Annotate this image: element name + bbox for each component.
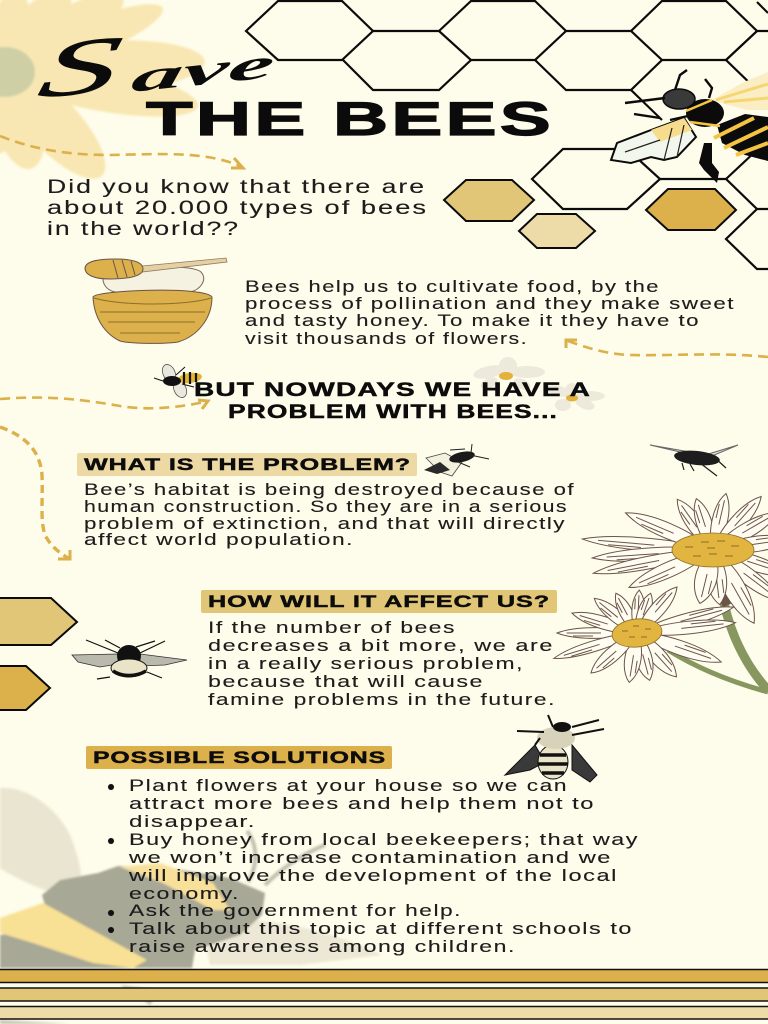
effect text: If the number of bees — [208, 619, 456, 637]
intro text: Did you know that there are — [47, 177, 426, 198]
intro text: about 20.000 types of bees — [47, 198, 428, 219]
effect text: in a really serious problem, — [208, 655, 524, 673]
title — [32, 18, 554, 145]
effect text: because that will cause — [208, 673, 484, 691]
bullet list: raise awareness among children. — [129, 938, 516, 956]
watercolor flower top left — [0, 0, 206, 194]
bullet list: disappear. — [129, 813, 256, 831]
problem text: human construction. So they are in a serious — [84, 498, 568, 516]
bullet list: attract more bees and help them not to — [129, 795, 595, 813]
panel: what is the problem — [77, 453, 575, 549]
panel: what is the problem: WHAT IS THE PROBLEM? — [84, 455, 411, 474]
main bee illustration — [611, 70, 768, 183]
dashed arrow to pollination text — [566, 340, 768, 357]
dashed arrow to intro — [0, 136, 243, 168]
effect text — [208, 619, 556, 709]
bullet list: Ask the government for help. — [129, 902, 462, 920]
problem text — [84, 481, 575, 549]
panel: possible solutions: POSSIBLE SOLUTIONS — [93, 748, 386, 767]
bullet list: economy. — [129, 885, 240, 903]
pollination text: visit thousands of flowers. — [245, 330, 528, 348]
problem text: problem of extinction, and that will directly — [84, 515, 566, 533]
pollination text — [245, 278, 735, 348]
effect text: famine problems in the future. — [208, 691, 556, 709]
bullet list: will improve the development of the local — [128, 867, 618, 885]
title script word: ave — [128, 40, 278, 102]
section heading: PROBLEM WITH BEES... — [228, 402, 558, 423]
bullet list: Plant flowers at your house so we can — [129, 777, 568, 795]
title script word: S — [32, 18, 129, 115]
intro text: in the world?? — [47, 219, 240, 240]
heading label — [86, 746, 392, 769]
title block word: THE BEES — [146, 92, 554, 145]
bullet list: Buy honey from local beekeepers; that way — [129, 831, 639, 849]
problem text: Bee’s habitat is being destroyed because of — [84, 481, 575, 499]
problem text: affect world population. — [84, 531, 354, 549]
panel: how will it affect us — [201, 590, 557, 709]
section heading: BUT NOWDAYS WE HAVE A — [194, 380, 591, 401]
icon: top view bee — [72, 640, 187, 679]
panel: possible solutions — [86, 746, 639, 956]
footer stripes — [0, 970, 768, 1019]
pollination text: process of pollination and they make sweet — [245, 295, 735, 313]
title script word — [32, 18, 278, 115]
intro text — [47, 177, 428, 240]
pollination text: and tasty honey. To make it they have to — [245, 312, 700, 330]
filled hexagons — [444, 180, 736, 248]
bullet list: we won’t increase contamination and we — [128, 849, 612, 867]
flower two — [545, 383, 605, 412]
icon: flying bee — [650, 445, 738, 476]
icon: side view bee — [424, 444, 489, 476]
heading label — [77, 453, 417, 476]
bullet list — [108, 777, 639, 956]
daisy illustration — [552, 491, 768, 692]
watercolor bee background — [0, 788, 382, 1024]
dashed arrow to problem section — [0, 427, 70, 559]
small white flowers — [472, 357, 605, 412]
icon: bee with spread wings — [505, 715, 604, 782]
stems — [722, 592, 768, 690]
small daisy — [552, 582, 736, 684]
section heading — [194, 380, 591, 423]
icon: small bee near heading — [154, 362, 203, 400]
honeycomb outlines — [246, 1, 768, 269]
flower one — [472, 357, 545, 392]
effect text: decreases a bit more, we are — [208, 637, 554, 655]
left pointing hexagon tabs — [0, 598, 77, 710]
pollination text: Bees help us to cultivate food, by the — [245, 278, 660, 296]
bullet list: Talk about this topic at different schools to — [129, 920, 633, 938]
heading label — [201, 590, 557, 613]
dashed arrow to heading — [0, 398, 208, 409]
panel: how will it affect us: HOW WILL IT AFFECT US? — [208, 592, 550, 611]
icon: honey jar — [85, 258, 227, 343]
large daisy — [582, 491, 768, 629]
